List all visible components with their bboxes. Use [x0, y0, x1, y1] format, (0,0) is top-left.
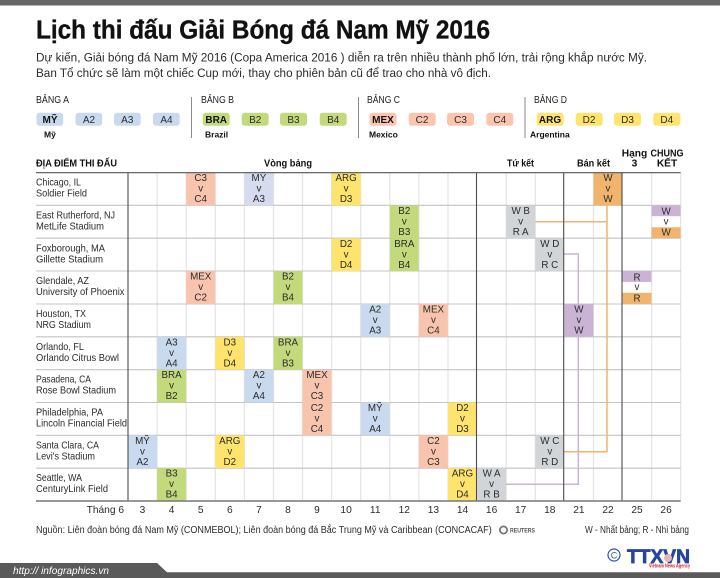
legend: group A: Mỹ: [44, 130, 56, 140]
row: Seattle: v: [460, 479, 465, 490]
row: Philadelphia: C4: [311, 424, 324, 435]
legend: group B: BRA: [205, 115, 227, 126]
row: Santa Clara: v: [431, 446, 436, 457]
date axis: 16: [486, 505, 498, 516]
row: Santa Clara: v: [140, 446, 145, 457]
row: Orlando: A4: [166, 358, 178, 369]
row: Chicago: v: [256, 184, 261, 195]
row: Chicago: C3: [194, 173, 208, 184]
row: Glendale: C2: [194, 293, 207, 304]
venue list: Chicago, IL: [36, 178, 81, 189]
row: Philadelphia: D3: [456, 424, 469, 435]
row: Santa Clara: A2: [137, 457, 148, 468]
row: Orlando: BRA: [278, 337, 299, 348]
connector: purple bracket: [506, 254, 578, 484]
row: Philadelphia: [302, 402, 476, 435]
venue list: East Rutherford, NJ: [36, 210, 115, 222]
row: East Rutherford: W: [661, 228, 671, 238]
row: Philadelphia: A4: [369, 424, 382, 435]
venue list: Seattle, WA: [36, 473, 82, 484]
legend: group C: C3: [454, 115, 467, 126]
row: Orlando: [157, 337, 302, 370]
row: Santa Clara: v: [547, 446, 552, 457]
row: East Rutherford: B3: [398, 227, 411, 238]
row: Pasadena: A4: [253, 391, 265, 402]
logo: TTXVN: C: [611, 550, 618, 560]
row: Pasadena: v: [256, 381, 261, 392]
column headers: KẾT: [657, 157, 678, 170]
row: Pasadena: C3: [311, 391, 324, 402]
date axis: 11: [370, 505, 381, 516]
row: Pasadena: MEX: [306, 370, 328, 381]
row: Santa Clara: C3: [427, 457, 440, 468]
row: Pasadena: A2: [253, 370, 265, 381]
column headers: CHUNG: [650, 149, 684, 160]
row: Orlando: A3: [166, 337, 178, 348]
column headers: ĐỊA ĐIỂM THI ĐẤU: [36, 157, 117, 170]
row: Orlando: B3: [282, 358, 295, 369]
row: Santa Clara: ARG: [219, 436, 240, 447]
legend: group C: C2: [416, 115, 429, 126]
row: Santa Clara: [128, 435, 563, 468]
logo: TTXVN: [608, 547, 690, 570]
row: Chicago: v: [606, 184, 611, 195]
footer bar: [0, 563, 720, 578]
row: Houston: A2: [369, 304, 381, 316]
row: Santa Clara: R D: [541, 457, 558, 468]
column headers: 3: [632, 159, 638, 170]
row: Philadelphia: C2: [311, 403, 323, 414]
intro text: [36, 50, 647, 80]
date axis: 18: [544, 505, 556, 516]
row: Houston: W: [574, 304, 584, 316]
row: Philadelphia: v: [460, 414, 465, 424]
venue list: Orlando, FL: [36, 342, 84, 353]
venue list: Houston, TX: [36, 309, 86, 320]
legend: group C: BẢNG C: [367, 93, 400, 106]
Reuters credit: REUTERS: [510, 528, 536, 535]
date axis: 14: [457, 505, 468, 516]
row: Foxborough: v: [402, 249, 407, 260]
row: Chicago: v: [198, 184, 203, 195]
row: Orlando: v: [227, 348, 232, 359]
venue list: Lincoln Financial Field: [36, 418, 127, 430]
source note: Nguồn: Liên đoàn bóng đá Nam Mỹ (CONMEBOL); Liên đoàn bóng đá Bắc Trung Mỹ và Caribbean (CONCACAF): [36, 525, 492, 536]
date axis: 6: [227, 505, 233, 516]
row: Houston: MEX: [423, 304, 444, 316]
top bar: [0, 0, 720, 6]
row: Chicago: C4: [194, 194, 208, 205]
venue list: Foxborough, MA: [36, 243, 105, 254]
row: Pasadena: v: [315, 381, 320, 392]
venue list: NRG Stadium: [36, 320, 91, 331]
row: Seattle: B4: [166, 490, 178, 501]
match grid: [128, 173, 681, 501]
row: Orlando: D4: [224, 358, 237, 369]
row: Seattle: v: [489, 479, 494, 490]
row: Houston: A3: [369, 326, 382, 336]
row: East Rutherford: W: [661, 206, 671, 218]
row: Houston: v: [431, 315, 436, 326]
title: Lịch thi đấu Giải Bóng đá Nam Mỹ 2016: [36, 16, 490, 44]
row: Houston: v: [576, 315, 581, 326]
legend: group A: BẢNG A: [36, 93, 69, 106]
row: Pasadena: B2: [166, 391, 178, 402]
row: Santa Clara: v: [227, 446, 232, 457]
row: Santa Clara: D2: [224, 457, 236, 468]
row: Chicago: [186, 173, 622, 206]
row: Orlando: D3: [224, 337, 237, 348]
row: Foxborough: D2: [340, 239, 352, 250]
row: East Rutherford: B2: [398, 206, 410, 217]
date axis: 25: [631, 505, 643, 516]
row: Chicago: W: [603, 173, 613, 184]
intro text: Dự kiến, Giải bóng đá Nam Mỹ 2016 (Copa America 2016 ) diễn ra trên nhiều thành phố lớn, trải rộng khắp nước Mỹ.: [36, 50, 647, 65]
row: Seattle: D4: [456, 490, 469, 501]
intro text: Ban Tổ chức sẽ làm một chiếc Cup mới, thay cho phiên bản cũ để trao cho nhà vô địch.: [36, 66, 491, 80]
row: Glendale: R: [633, 272, 641, 284]
row: East Rutherford: W B: [511, 206, 530, 217]
legend: group D: D3: [621, 115, 634, 126]
date axis: 7: [256, 505, 262, 516]
row: East Rutherford: v: [402, 216, 407, 228]
row: Foxborough: BRA: [394, 239, 415, 250]
venue list: Orlando Citrus Bowl: [36, 353, 119, 364]
row: Foxborough: W D: [540, 239, 559, 250]
row: Philadelphia: MỸ: [368, 403, 383, 414]
row: Glendale: v: [286, 282, 291, 293]
date axis: 10: [340, 505, 352, 516]
logo: TTXVN: Vietnam News Agency: [649, 564, 690, 570]
legend: group B: B3: [287, 115, 300, 126]
venue list: Philadelphia, PA: [36, 408, 103, 418]
date axis: 5: [198, 505, 204, 516]
date axis: 9: [314, 505, 320, 516]
date axis: Tháng 6: [87, 505, 124, 516]
footer bar: http:// infographics.vn: [13, 565, 109, 577]
row: Chicago: D3: [340, 194, 353, 205]
venue list: CenturyLink Field: [36, 484, 108, 495]
row: Glendale: MEX: [190, 272, 212, 283]
row: Houston: W: [574, 326, 584, 336]
row: Chicago: W: [603, 194, 613, 205]
legend: group D: D2: [583, 115, 596, 126]
column headers: [36, 149, 684, 170]
date axis: 13: [428, 505, 439, 516]
date axis: 26: [660, 505, 672, 516]
row: Glendale: B2: [282, 272, 294, 283]
date axis: 17: [515, 505, 527, 516]
legend: group C: Mexico: [369, 130, 398, 140]
row: Chicago: v: [344, 184, 349, 195]
row: Seattle: W A: [483, 469, 501, 480]
venue list: Gillette Stadium: [36, 254, 103, 265]
column headers: Vòng bảng: [264, 159, 312, 170]
logo: TTXVN: TTXVN: [627, 547, 690, 568]
row: Philadelphia: v: [373, 414, 378, 424]
row: Pasadena: v: [169, 381, 174, 392]
venue list: Soldier Field: [36, 189, 87, 200]
row: Glendale: v: [198, 282, 203, 293]
row: Orlando: v: [286, 348, 291, 359]
row: Houston: C4: [427, 326, 440, 336]
legend: group A: A2: [83, 115, 96, 126]
legend: group A: [36, 93, 180, 140]
Reuters credit: [500, 526, 536, 535]
date axis: 3: [140, 505, 146, 516]
venue list: Pasadena, CA: [36, 375, 91, 386]
column headers: Hạng: [622, 149, 647, 160]
row: Santa Clara: W C: [540, 436, 559, 447]
row: Philadelphia: v: [315, 414, 320, 424]
legend: group D: ARG: [539, 115, 561, 126]
legend: group B: B4: [327, 115, 340, 126]
row: Orlando: v: [169, 348, 174, 359]
row: East Rutherford: R A: [513, 227, 529, 238]
legend: group D: [530, 93, 680, 140]
row: Chicago: ARG: [335, 173, 357, 184]
column headers: Bán kết: [577, 158, 611, 170]
venue list: University of Phoenix: [36, 287, 125, 298]
legend: group C: C4: [493, 115, 507, 126]
row: Philadelphia: D2: [456, 403, 469, 414]
legend: group C: [367, 93, 513, 140]
row: Santa Clara: C2: [427, 436, 440, 447]
legend: group D: D4: [660, 115, 674, 126]
venue list: Santa Clara, CA: [36, 440, 99, 451]
date axis: 21: [573, 505, 585, 516]
venue list: Rose Bowl Stadium: [36, 386, 116, 397]
row: Seattle: R B: [483, 490, 500, 501]
row: Glendale: v: [635, 282, 640, 293]
row: Pasadena: BRA: [162, 370, 182, 381]
row: East Rutherford: v: [664, 216, 669, 228]
legend: group C: MEX: [372, 115, 394, 126]
legend note: W - Nhất bảng; R - Nhì bảng: [585, 525, 689, 536]
date axis: 4: [169, 505, 175, 516]
legend: group B: Brazil: [205, 130, 228, 140]
legend: group A: A3: [121, 115, 134, 126]
venue list: MetLife Stadium: [36, 222, 104, 232]
row: Foxborough: v: [547, 249, 552, 260]
legend: group B: B2: [249, 115, 262, 126]
row: Houston: v: [373, 315, 378, 326]
legend: group B: BẢNG B: [201, 93, 234, 106]
legend: group D: Argentina: [530, 130, 570, 140]
legend: group D: BẢNG D: [534, 93, 567, 106]
row: Chicago: MỸ: [252, 173, 267, 184]
legend: group B: [201, 93, 347, 140]
row: Glendale: [186, 271, 651, 304]
row: Foxborough: B4: [398, 260, 411, 271]
row: Foxborough: v: [344, 249, 349, 260]
legend: group A: MỸ: [42, 113, 58, 126]
row: Seattle: [157, 468, 506, 501]
date axis: [87, 505, 672, 516]
date axis: 22: [602, 505, 614, 516]
venue list: Levi's Stadium: [36, 451, 95, 462]
column headers: Tứ kết: [507, 158, 535, 170]
row: Foxborough: D4: [340, 260, 353, 271]
row: Foxborough: R C: [541, 260, 558, 271]
connector: orange bracket: [535, 206, 607, 452]
legend: group A: A4: [160, 115, 173, 126]
row: Santa Clara: MỸ: [135, 436, 150, 447]
row: Glendale: B4: [282, 293, 295, 304]
row: Glendale: R: [633, 294, 641, 304]
row: Seattle: v: [169, 479, 174, 490]
venue list: [36, 178, 127, 495]
row: Seattle: ARG: [452, 469, 473, 480]
row: Houston: [361, 304, 593, 337]
row: Seattle: B3: [166, 469, 178, 480]
date axis: 8: [285, 505, 291, 516]
row: East Rutherford: v: [518, 216, 523, 228]
row: Pasadena: [157, 370, 332, 402]
row: Foxborough: [332, 238, 563, 271]
row: Chicago: A3: [253, 194, 265, 205]
venue list: Glendale, AZ: [36, 276, 90, 287]
date axis: 12: [399, 505, 410, 516]
row: East Rutherford: [390, 206, 681, 238]
